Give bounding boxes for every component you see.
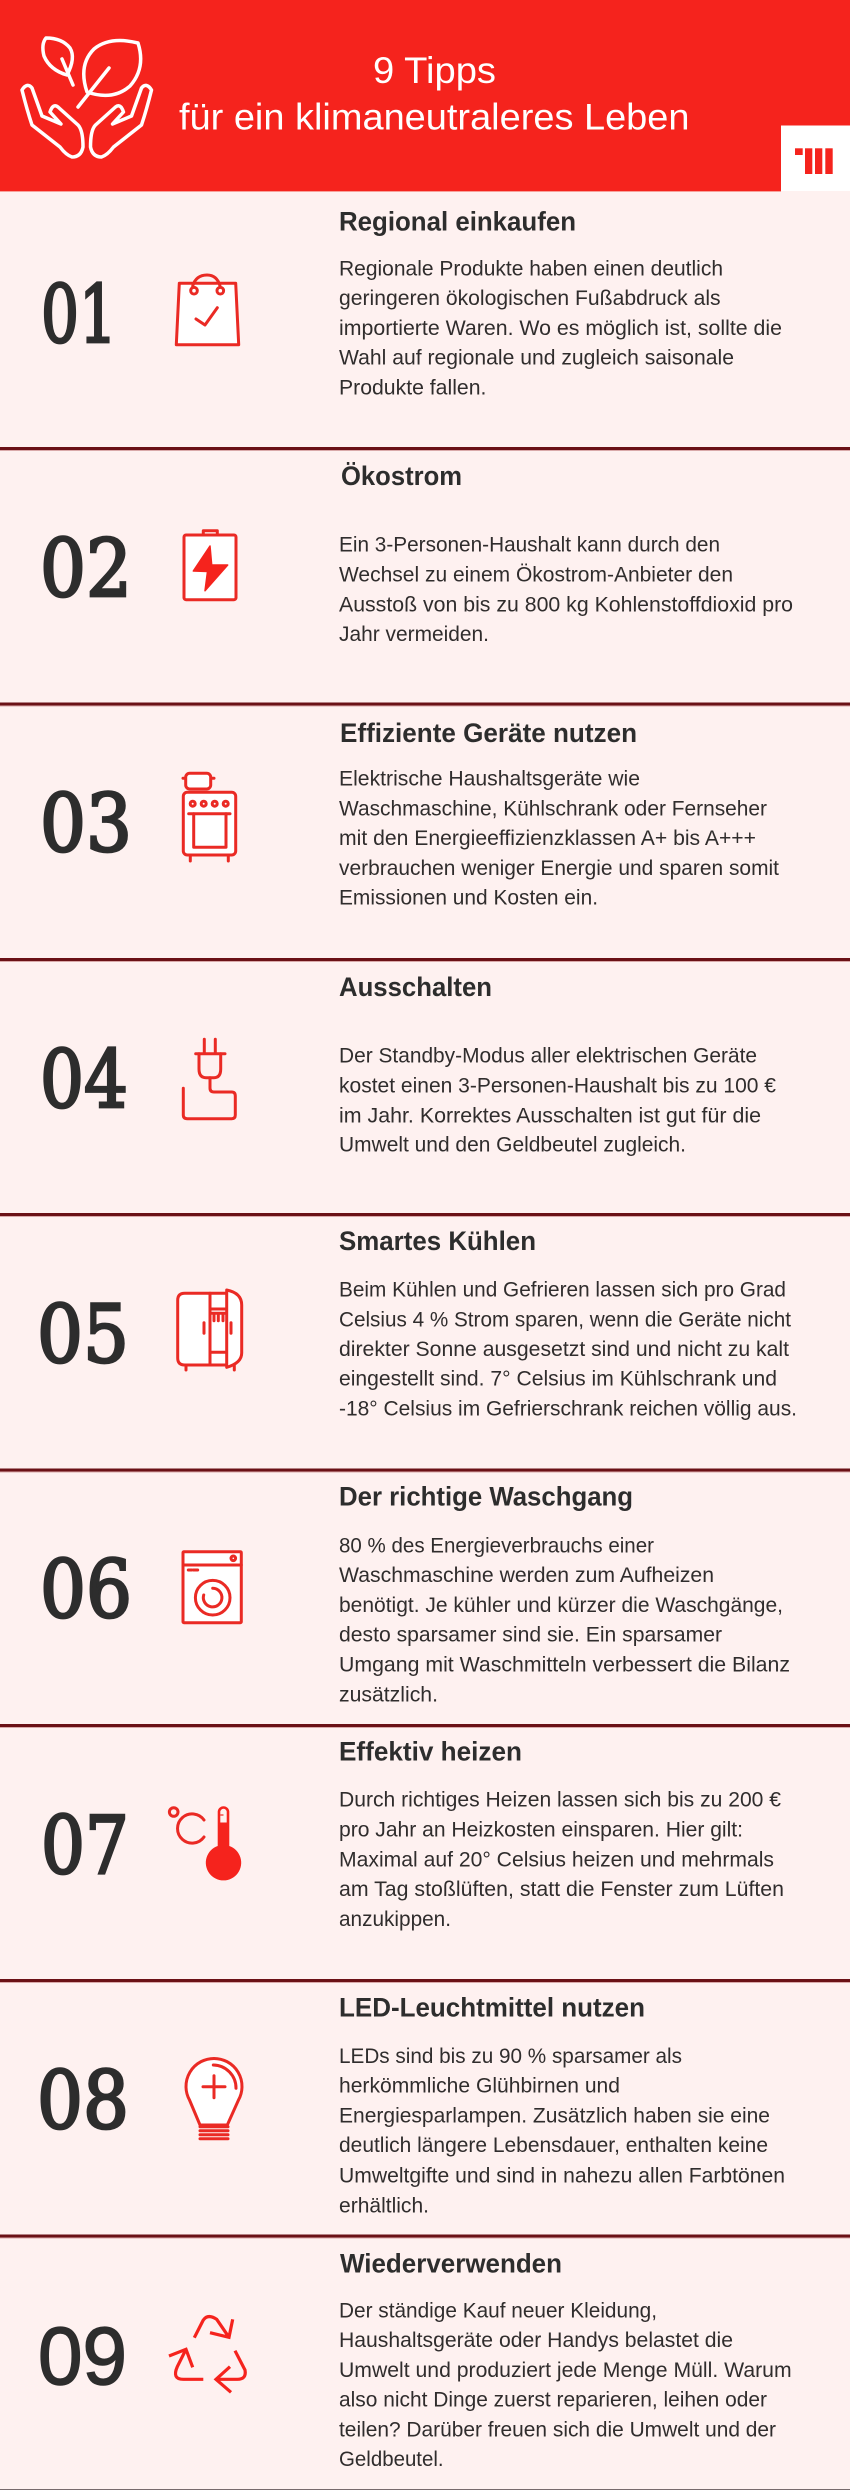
logo	[781, 126, 850, 191]
body text: Regionale Produkte haben einen deutlich	[339, 257, 723, 280]
panel: tip 08 LED-Leuchtmittel nutzen	[0, 1983, 850, 2234]
heading: Regional einkaufen	[339, 207, 576, 237]
heading: Ausschalten	[339, 972, 492, 1002]
header banner	[0, 0, 850, 191]
body text: pro Jahr an Heizkosten einsparen. Hier gilt:	[339, 1818, 743, 1842]
body text: geringeren ökologischen Fußabdruck als	[339, 287, 721, 310]
body text: -18° Celsius im Gefrierschrank reichen völlig aus.	[339, 1398, 797, 1421]
body text: Geldbeutel.	[339, 2448, 444, 2471]
body text: verbrauchen weniger Energie und sparen somit	[339, 857, 779, 880]
body text	[339, 1788, 784, 1931]
icon: plug with cord	[183, 1039, 235, 1119]
body text: eingestellt sind. 7° Celsius im Kühlschrank und	[339, 1368, 777, 1391]
body text: Waschmaschine, Kühlschrank oder Fernseher	[339, 798, 767, 821]
body text: Beim Kühlen und Gefrieren lassen sich pro Grad	[339, 1279, 786, 1302]
heading: Der richtige Waschgang	[339, 1482, 633, 1512]
body text: Maximal auf 20° Celsius heizen und mehrmals	[339, 1848, 774, 1872]
number 03: 03	[40, 777, 132, 870]
body text: mit den Energieeffizienzklassen A+ bis A+++	[339, 827, 756, 850]
number 01: 01	[41, 268, 117, 361]
body text: Haushaltsgeräte oder Handys belastet die	[339, 2329, 733, 2352]
body text: benötigt. Je kühler und kürzer die Waschgänge,	[339, 1594, 783, 1617]
title	[179, 50, 690, 138]
panel: tip 07 Effektiv heizen	[0, 1727, 850, 1979]
icon: open fridge	[178, 1290, 242, 1370]
body text: Waschmaschine werden zum Aufheizen	[339, 1564, 714, 1587]
body text: kostet einen 3-Personen-Haushalt bis zu 100 €	[339, 1074, 776, 1097]
title: 9 Tipps	[373, 50, 496, 91]
body text: anzukippen.	[339, 1908, 451, 1931]
body text	[339, 534, 793, 646]
number 08: 08	[37, 2054, 129, 2147]
panel: tip 01 Regional einkaufen	[0, 191, 850, 447]
body text: desto sparsamer sind sie. Ein sparsamer	[339, 1623, 722, 1646]
number 04: 04	[40, 1033, 128, 1126]
body text: LEDs sind bis zu 90 % sparsamer als	[339, 2045, 682, 2068]
body text: herkömmliche Glühbirnen und	[339, 2075, 620, 2098]
body text	[339, 768, 779, 909]
body text: Umwelt und produziert jede Menge Müll. Warum	[339, 2359, 792, 2382]
icon: hands holding leaves	[22, 38, 152, 157]
number 02: 02	[40, 522, 132, 615]
number 07: 07	[41, 1799, 129, 1892]
body text: also nicht Dinge zuerst reparieren, leihen oder	[339, 2389, 767, 2412]
body text: Produkte fallen.	[339, 377, 486, 400]
body text: Wechsel zu einem Ökostrom-Anbieter den	[339, 564, 733, 587]
body text: Umwelt und den Geldbeutel zugleich.	[339, 1134, 686, 1157]
heading: Effektiv heizen	[339, 1736, 522, 1766]
heading: Ökostrom	[341, 461, 462, 491]
body text: Celsius 4 % Strom sparen, wenn die Geräte nicht	[339, 1309, 791, 1332]
body text: Umgang mit Waschmitteln verbessert die Bilanz	[339, 1654, 790, 1676]
icon: thermometer with degree symbol	[169, 1806, 241, 1880]
body text: Umweltgifte und sind in nahezu allen Farbtönen	[339, 2164, 785, 2187]
body text: Ausstoß von bis zu 800 kg Kohlenstoffdioxid pro	[339, 594, 793, 617]
body text: Jahr vermeiden.	[339, 623, 489, 646]
icon: recycling arrows	[169, 2317, 245, 2392]
heading: Smartes Kühlen	[339, 1226, 536, 1256]
icon: stove with pot	[183, 773, 236, 861]
body text: deutlich längere Lebensdauer, enthalten keine	[339, 2134, 768, 2157]
body text: Wahl auf regionale und zugleich saisonale	[339, 347, 734, 370]
body text	[339, 2045, 785, 2217]
panel: tip 04 Ausschalten	[0, 961, 850, 1213]
body text: zusätzlich.	[339, 1684, 438, 1706]
icon: light bulb	[186, 2058, 242, 2139]
body text: am Tag stoßlüften, statt die Fenster zum Lüften	[339, 1878, 784, 1901]
panel: tip 05 Smartes Kühlen	[0, 1217, 850, 1468]
body text	[339, 1279, 797, 1421]
body text	[339, 1044, 776, 1157]
icon: washing machine	[183, 1552, 241, 1623]
body text	[339, 2299, 792, 2471]
body text	[339, 1534, 790, 1706]
body text: teilen? Darüber freuen sich die Umwelt und der	[339, 2418, 776, 2441]
body text: 80 % des Energieverbrauchs einer	[339, 1534, 654, 1557]
body text: Ein 3-Personen-Haushalt kann durch den	[339, 534, 720, 557]
body text: Elektrische Haushaltsgeräte wie	[339, 768, 640, 791]
body text: im Jahr. Korrektes Ausschalten ist gut für die	[339, 1104, 761, 1127]
heading: Effiziente Geräte nutzen	[340, 718, 637, 748]
title: für ein klimaneutraleres Leben	[179, 96, 690, 138]
body text: erhältlich.	[339, 2194, 429, 2217]
panel: tip 03 Effiziente Geräte nutzen	[0, 706, 850, 958]
heading: Wiederverwenden	[340, 2249, 562, 2279]
icon: shopping bag	[176, 275, 239, 345]
body text: Energiesparlampen. Zusätzlich haben sie eine	[339, 2105, 770, 2128]
body text	[339, 257, 782, 400]
body text: Durch richtiges Heizen lassen sich bis zu 200 €	[339, 1788, 781, 1812]
panel: tip 06 Der richtige Waschgang	[0, 1472, 850, 1723]
body text: Emissionen und Kosten ein.	[339, 886, 598, 909]
body text: direkter Sonne ausgesetzt sind und nicht zu kalt	[339, 1338, 789, 1361]
panel: tip 02 Ökostrom	[0, 450, 850, 702]
heading: LED-Leuchtmittel nutzen	[339, 1992, 645, 2022]
body text: Der ständige Kauf neuer Kleidung,	[339, 2299, 657, 2322]
number 05: 05	[37, 1288, 129, 1381]
number 09: 09	[38, 2311, 127, 2402]
panel: tip 09 Wiederverwenden	[0, 2238, 850, 2489]
body text: importierte Waren. Wo es möglich ist, sollte die	[339, 317, 782, 340]
body text: Der Standby-Modus aller elektrischen Geräte	[339, 1044, 757, 1067]
number 06: 06	[40, 1543, 132, 1636]
icon: battery with bolt	[184, 531, 236, 600]
